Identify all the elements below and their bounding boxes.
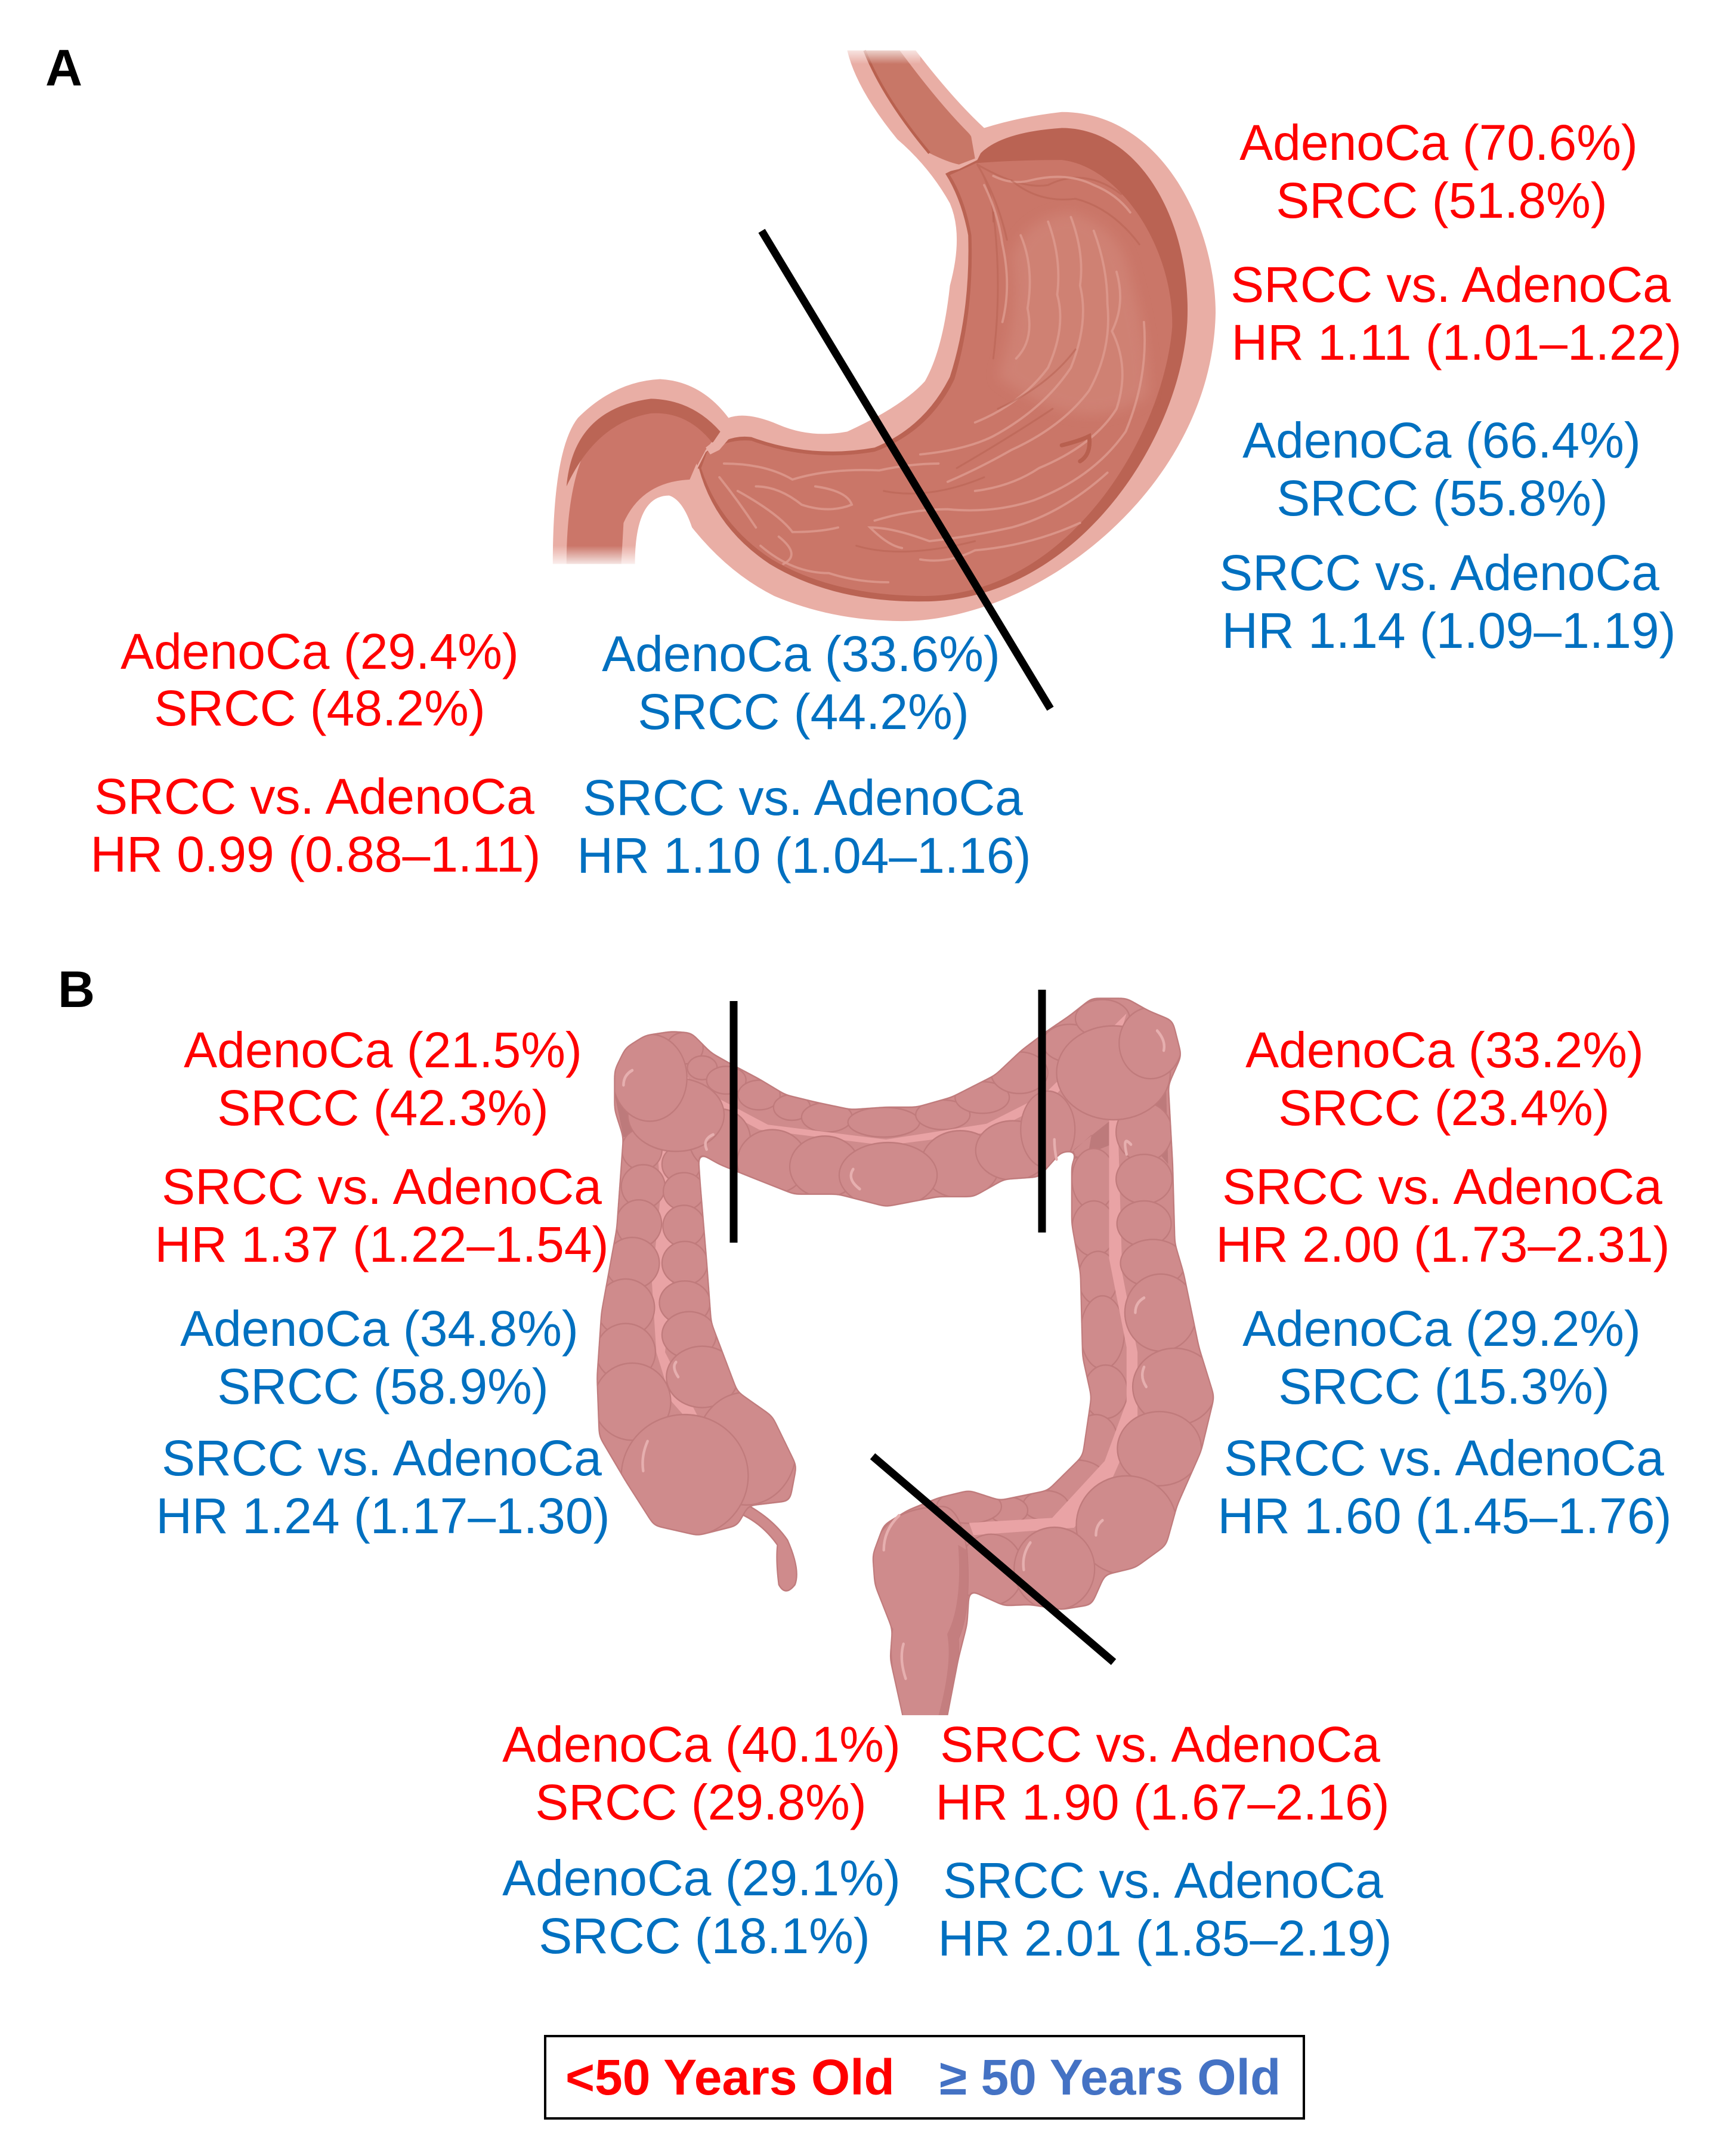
- stats: stomach upper, under 50: SRCC (51.8%): [1276, 172, 1607, 228]
- stats: rectum hazard ratio, 50 and over: HR 2.01 (1.85–2.19): [938, 1910, 1392, 1966]
- colon silhouette: [597, 999, 1214, 1738]
- stats: left colon, under 50: SRCC (23.4%): [1278, 1080, 1610, 1136]
- divider line: left colon boundary: [1038, 990, 1046, 1233]
- legend: 50 and over: ≥ 50 Years Old: [939, 2049, 1281, 2105]
- stats: right colon, 50 and over: SRCC (58.9%): [217, 1358, 549, 1414]
- stats: stomach lower, 50 and over: SRCC (44.2%): [638, 684, 969, 740]
- legend: under 50: <50 Years Old: [565, 2049, 895, 2105]
- stats: stomach lower, 50 and over: [577, 626, 1031, 884]
- stats: right colon, 50 and over: [156, 1301, 610, 1544]
- appendix: [744, 1503, 797, 1591]
- stats: rectum percentages, 50 and over: AdenoCa (29.1%): [502, 1850, 901, 1906]
- stats: left colon, 50 and over: AdenoCa (29.2%): [1242, 1301, 1641, 1357]
- stats: stomach upper, 50 and over: HR 1.14 (1.09–1.19): [1222, 603, 1676, 659]
- stats: stomach upper, 50 and over: SRCC vs. AdenoCa: [1219, 545, 1659, 601]
- stats: stomach lower, under 50: SRCC vs. AdenoCa: [94, 768, 534, 824]
- stats: left colon, under 50: [1216, 1022, 1670, 1272]
- stats: rectum hazard ratio, under 50: SRCC vs. AdenoCa: [940, 1716, 1380, 1772]
- stats: stomach upper, under 50: HR 1.11 (1.01–1.22): [1232, 314, 1681, 370]
- stats: left colon, under 50: HR 2.00 (1.73–2.31): [1216, 1216, 1670, 1272]
- stats: stomach upper, under 50: SRCC vs. AdenoCa: [1230, 257, 1671, 313]
- illustration: colon: [593, 999, 1217, 1750]
- panel label A: A: [45, 39, 82, 97]
- stats: stomach lower, under 50: HR 0.99 (0.88–1.11): [91, 826, 540, 882]
- stats: right colon, under 50: [154, 1022, 609, 1272]
- stats: left colon, 50 and over: HR 1.60 (1.45–1.76): [1217, 1488, 1672, 1544]
- haustra folds: [593, 1000, 1217, 1738]
- stats: rectum percentages, under 50: AdenoCa (40.1%): [502, 1716, 901, 1772]
- stats: right colon, under 50: HR 1.37 (1.22–1.54): [154, 1216, 609, 1272]
- stats: right colon, under 50: AdenoCa (21.5%): [184, 1022, 582, 1078]
- stats: right colon, under 50: SRCC vs. AdenoCa: [162, 1159, 602, 1215]
- illustration: stomach: [546, 44, 1216, 621]
- stats: stomach upper, 50 and over: [1219, 412, 1676, 659]
- stats: rectum hazard ratio, under 50: HR 1.90 (1.67–2.16): [935, 1774, 1390, 1830]
- stats: right colon, under 50: SRCC (42.3%): [217, 1080, 549, 1136]
- stats: rectum percentages, under 50: SRCC (29.8%): [535, 1774, 867, 1830]
- stats: stomach lower, 50 and over: AdenoCa (33.6%): [602, 626, 1000, 682]
- stats: rectum hazard ratio, under 50: [935, 1716, 1390, 1830]
- panel label B: B: [58, 961, 95, 1018]
- stats: stomach upper, 50 and over: SRCC (55.8%): [1276, 470, 1608, 526]
- divider line: rectosigmoid boundary: [873, 1456, 1114, 1662]
- stats: left colon, under 50: AdenoCa (33.2%): [1245, 1022, 1644, 1078]
- stats: stomach lower, 50 and over: HR 1.10 (1.04–1.16): [577, 827, 1031, 884]
- stats: rectum hazard ratio, 50 and over: [938, 1852, 1392, 1966]
- stats: stomach lower, under 50: [91, 623, 540, 882]
- stats: stomach upper, 50 and over: AdenoCa (66.4%): [1242, 412, 1641, 468]
- highlights: [623, 1031, 1164, 1679]
- stats: right colon, 50 and over: HR 1.24 (1.17–1.30): [156, 1488, 610, 1544]
- stats: rectum percentages, 50 and over: SRCC (18.1%): [539, 1908, 870, 1964]
- stats: left colon, under 50: SRCC vs. AdenoCa: [1222, 1159, 1662, 1215]
- stats: left colon, 50 and over: [1217, 1301, 1672, 1544]
- stats: stomach upper, under 50: [1230, 115, 1681, 370]
- stats: right colon, 50 and over: AdenoCa (34.8%): [180, 1301, 579, 1357]
- stats: right colon, 50 and over: SRCC vs. AdenoCa: [162, 1430, 602, 1486]
- stats: rectum percentages, 50 and over: [502, 1850, 901, 1964]
- stats: stomach lower, under 50: SRCC (48.2%): [154, 680, 486, 736]
- stats: rectum hazard ratio, 50 and over: SRCC vs. AdenoCa: [943, 1852, 1383, 1908]
- stats: left colon, 50 and over: SRCC (15.3%): [1278, 1358, 1610, 1414]
- stats: left colon, 50 and over: SRCC vs. AdenoCa: [1224, 1430, 1664, 1486]
- legend: [545, 2036, 1304, 2118]
- stats: stomach upper, under 50: AdenoCa (70.6%): [1239, 115, 1638, 171]
- stats: rectum percentages, under 50: [502, 1716, 901, 1830]
- divider line: stomach: [762, 231, 1050, 709]
- divider line: right colon boundary: [730, 1001, 737, 1243]
- stats: stomach lower, 50 and over: SRCC vs. AdenoCa: [583, 770, 1023, 826]
- stats: stomach lower, under 50: AdenoCa (29.4%): [120, 623, 519, 679]
